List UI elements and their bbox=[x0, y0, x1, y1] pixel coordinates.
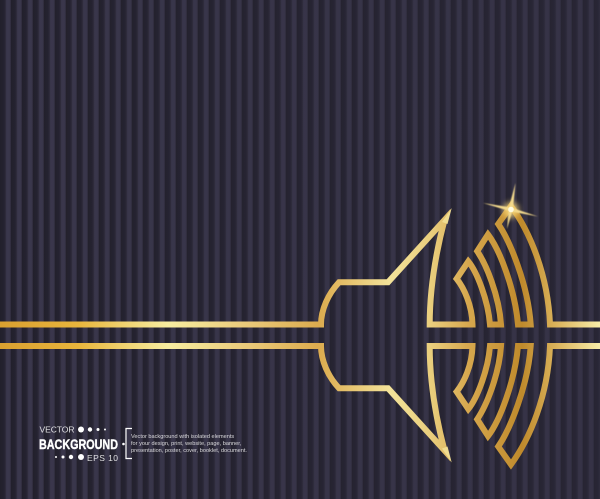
description text: presentation, poster, cover, booklet, document. bbox=[131, 448, 247, 454]
logo block bbox=[39, 424, 247, 463]
description text: Vector background with isolated elements bbox=[131, 434, 234, 440]
bracket bbox=[126, 428, 132, 458]
label: eps 10: EPS 10 bbox=[87, 453, 118, 463]
dots row bottom bbox=[55, 454, 84, 460]
label: vector: VECTOR bbox=[40, 424, 74, 434]
icon: sparkle star bbox=[483, 183, 538, 229]
heading: background: BACKGROUND bbox=[39, 437, 118, 452]
dots row top bbox=[78, 426, 106, 432]
speaker and sound waves: upper half bbox=[0, 206, 600, 464]
horn tip lower bbox=[442, 446, 452, 462]
description text: for your design, print, website, page, banner, bbox=[131, 441, 242, 447]
description text bbox=[131, 434, 247, 454]
bracket pointer bbox=[122, 443, 125, 445]
horn tip upper bbox=[442, 208, 452, 224]
speaker and sound waves: lower half bbox=[0, 346, 600, 464]
